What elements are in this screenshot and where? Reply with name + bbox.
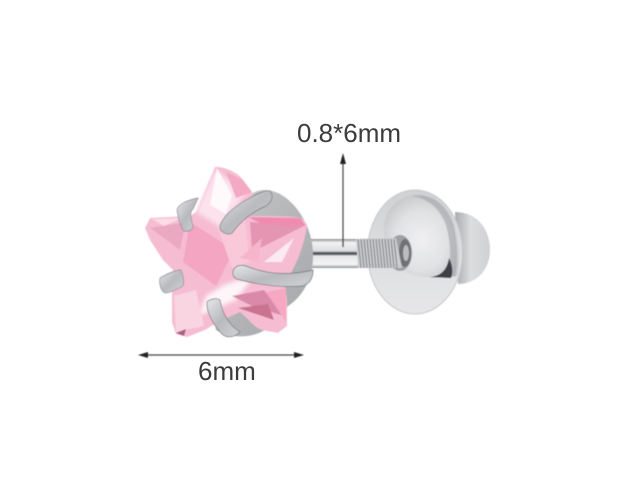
nut hole xyxy=(388,235,412,271)
right sparkles xyxy=(264,238,294,262)
left arm xyxy=(150,222,186,250)
rear cap xyxy=(455,212,490,284)
lower white flash xyxy=(198,276,254,316)
prong left xyxy=(160,270,184,293)
dome xyxy=(384,195,459,278)
icon: screw back nut xyxy=(368,190,490,314)
top point light xyxy=(196,170,246,228)
label: post size: 0.8*6mm xyxy=(297,118,401,148)
gem facets xyxy=(150,168,306,336)
right facet dark xyxy=(250,222,304,252)
smooth post xyxy=(308,239,360,268)
setting base xyxy=(200,190,313,336)
label: star width: 6mm xyxy=(198,356,256,386)
prong right xyxy=(233,265,313,287)
dome shadow xyxy=(412,195,457,276)
thread xyxy=(356,238,402,268)
centre right light xyxy=(218,215,250,268)
arrow: post length dimension xyxy=(340,153,346,247)
icon: threaded post xyxy=(308,235,412,271)
icon: pink star stud xyxy=(145,167,313,337)
front disc xyxy=(368,190,462,314)
lower right dark xyxy=(232,290,284,316)
lower left xyxy=(174,290,204,332)
prong bottom xyxy=(207,299,240,337)
prong top right xyxy=(220,191,272,234)
top right facet xyxy=(226,172,252,198)
centre facet xyxy=(183,222,234,286)
prong top left xyxy=(177,198,198,231)
dark reflection xyxy=(430,258,452,278)
arrow: star width dimension xyxy=(138,352,304,358)
star gem xyxy=(145,167,307,337)
